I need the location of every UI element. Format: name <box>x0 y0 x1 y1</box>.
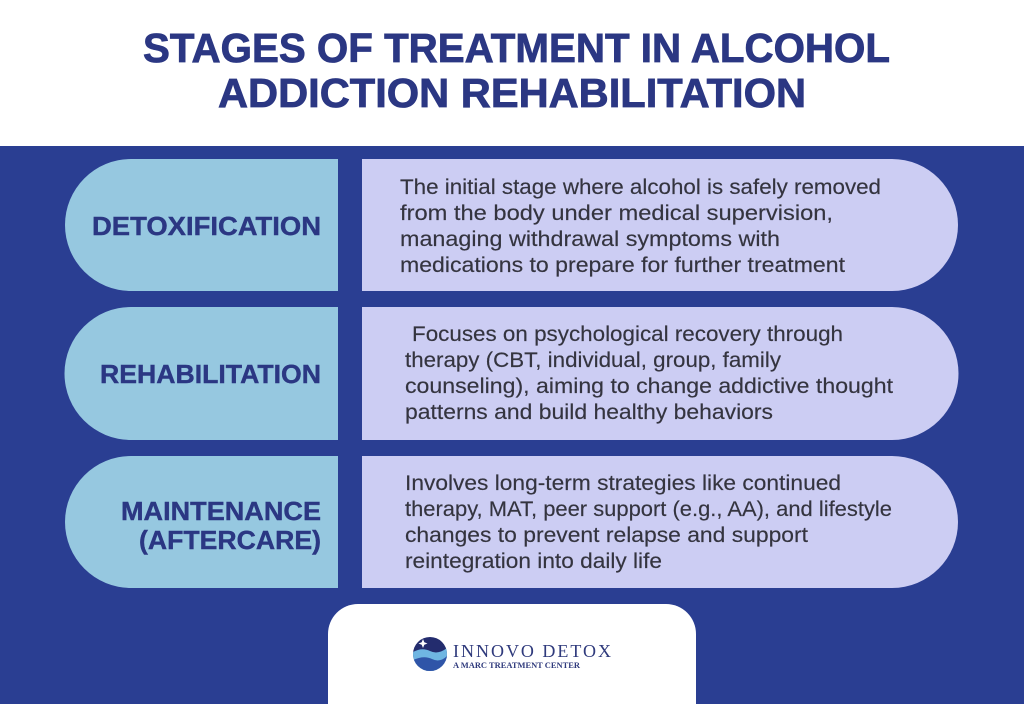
panel: rehabilitation description: therapy (CBT, individual, group, family <box>405 349 782 372</box>
logo card <box>328 604 696 704</box>
panel: maintenance description: reintegration into daily life <box>405 550 662 573</box>
blue background band <box>0 146 1024 704</box>
panel: rehabilitation description: Focuses on psychological recovery through <box>412 323 843 346</box>
panel: rehabilitation label <box>64 307 338 440</box>
panel: detoxification label <box>65 159 338 291</box>
title: STAGES OF TREATMENT IN ALCOHOL <box>143 25 890 71</box>
panel: maintenance label <box>65 456 338 588</box>
panel: detoxification description: managing withdrawal symptoms with <box>400 228 780 251</box>
panel: rehabilitation label: REHABILITATION <box>100 359 321 389</box>
panel: maintenance description: Involves long-term strategies like continued <box>405 472 841 495</box>
panel: detoxification description: from the body under medical supervision, <box>400 202 833 225</box>
panel: maintenance description: changes to prevent relapse and support <box>405 524 808 547</box>
title <box>143 25 890 116</box>
panel: detoxification label: DETOXIFICATION <box>92 211 321 241</box>
panel: maintenance label: (AFTERCARE) <box>139 525 321 555</box>
panel: detoxification description: The initial stage where alcohol is safely removed <box>400 176 881 199</box>
logo wordmark <box>453 641 611 670</box>
panel: maintenance description: therapy, MAT, peer support (e.g., AA), and lifestyle <box>405 498 892 521</box>
panel: detoxification description <box>362 159 958 291</box>
panel: detoxification description: medications to prepare for further treatment <box>400 254 845 277</box>
panel: rehabilitation description: patterns and build healthy behaviors <box>405 401 773 424</box>
panel: maintenance description <box>362 456 958 588</box>
logo wordmark: A MARC TREATMENT CENTER <box>453 660 581 670</box>
panel: rehabilitation description <box>362 307 958 440</box>
panel: maintenance label: MAINTENANCE <box>121 496 321 526</box>
title: ADDICTION REHABILITATION <box>218 70 806 116</box>
logo wordmark: INNOVO DETOX <box>453 641 611 661</box>
icon: logo globe with waves <box>413 637 447 671</box>
panel: rehabilitation description: counseling), aiming to change addictive thought <box>405 375 893 398</box>
